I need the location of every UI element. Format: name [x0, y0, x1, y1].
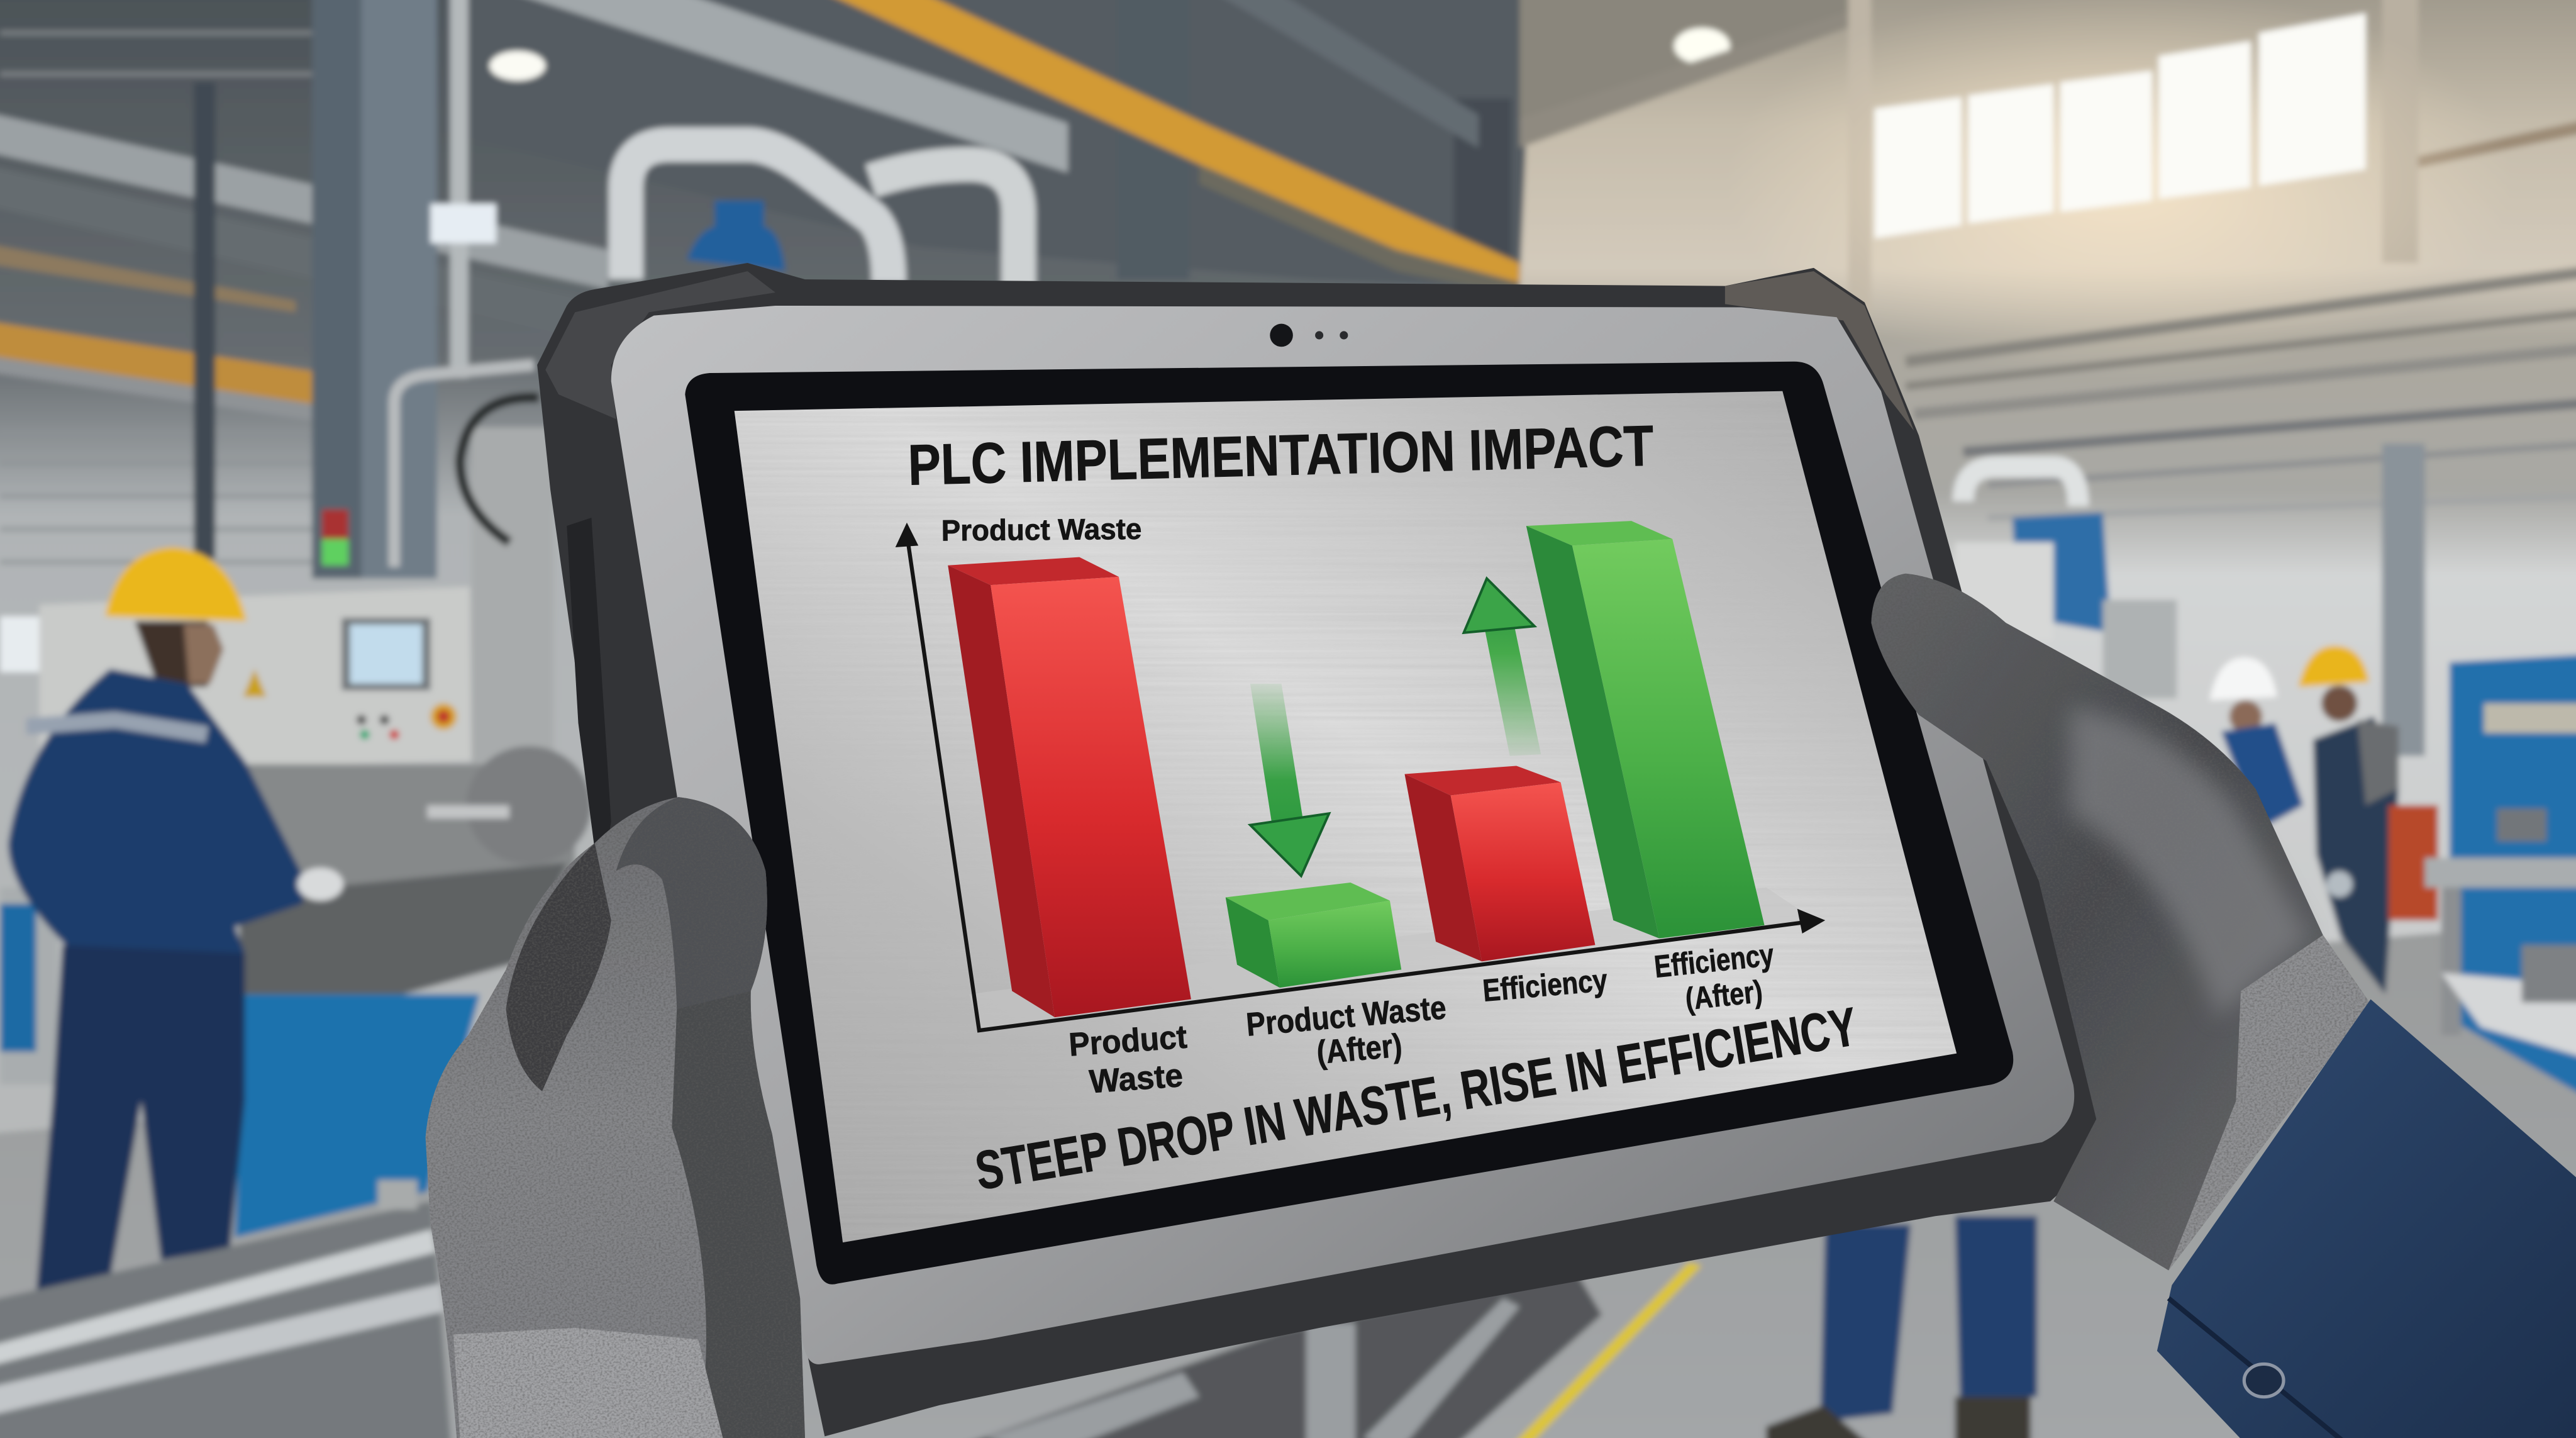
left wall and ceiling [0, 0, 1528, 1315]
right sleeve [2157, 999, 2576, 1438]
glove hand [297, 867, 343, 901]
orange beam left [0, 320, 316, 404]
white hard hat worker [2209, 657, 2303, 830]
bar: efficiency after [1526, 521, 1765, 939]
under-tablet frame area [936, 1274, 1602, 1438]
brushed metal display [735, 391, 1957, 1242]
orange main beam [805, 0, 1519, 282]
helmet [105, 547, 247, 621]
steel rails [0, 1201, 452, 1438]
aluminium bezel [611, 306, 2074, 1364]
blue valve [687, 201, 786, 271]
right glove body [1871, 574, 2370, 1271]
case bumper highlight [545, 271, 775, 419]
right ceiling [1519, 0, 1848, 128]
overhead beam left [0, 112, 608, 289]
standing worker legs [1820, 1216, 2037, 1422]
long duct [485, 0, 1068, 172]
left dark finger patch [506, 843, 611, 1091]
chart title: PLC IMPLEMENTATION IMPACT [907, 414, 1655, 498]
wall corrugation left [0, 33, 312, 562]
right side upper wall lines [1519, 8, 1857, 148]
left shelving [0, 888, 57, 1084]
arrow: efficiency rises [1464, 579, 1541, 756]
right gloved hand [1871, 574, 2576, 1438]
category label: product waste: Waste [1088, 1057, 1184, 1100]
vertical conduit [450, 0, 468, 378]
light glow [1725, 0, 2514, 378]
machine column [472, 427, 553, 772]
silver pipes [626, 145, 889, 282]
category label: efficiency after: (After) [1684, 974, 1764, 1017]
rear column [1117, 0, 1189, 279]
frame struts [985, 1298, 1519, 1438]
left glove shaded side [672, 991, 805, 1438]
worker left [8, 547, 343, 1293]
right glove knuckle highlight [2070, 706, 2308, 1019]
sleeve cuff edge [2168, 1298, 2350, 1438]
category label: product waste [1068, 1019, 1188, 1100]
window [1875, 13, 2366, 238]
steel column [312, 0, 437, 579]
category label: product waste after [1245, 989, 1448, 1071]
category label: product waste: Product [1068, 1019, 1188, 1064]
head [135, 621, 223, 687]
ceiling lights [489, 51, 545, 81]
chart floor shading [969, 888, 1816, 1030]
category label: efficiency after: Efficiency [1653, 937, 1775, 984]
panel buttons [357, 703, 457, 740]
arrow: waste drops [1250, 684, 1329, 876]
brushed texture [735, 391, 1957, 1242]
red cabinet [2389, 805, 2438, 920]
yellow hard hat worker [2299, 646, 2399, 995]
right glove cuff [2168, 935, 2370, 1271]
blue cabinet [2450, 654, 2576, 1101]
left gloved hand [426, 797, 805, 1438]
tablet rugged case [537, 263, 2103, 1436]
lathe chuck [467, 746, 591, 864]
left thumb [616, 797, 767, 1019]
blue machine base [235, 995, 480, 1237]
signal tower light [322, 510, 348, 566]
machine body [247, 764, 575, 896]
bar: product waste [948, 557, 1191, 1017]
sleeve button [2244, 1364, 2284, 1397]
category label: efficiency after [1653, 937, 1775, 1017]
category label: product waste after: (After) [1315, 1027, 1404, 1071]
top right bumper [1725, 271, 1914, 430]
bar: efficiency [1404, 766, 1595, 961]
trousers [36, 945, 245, 1293]
bar: product waste after [1226, 883, 1401, 988]
category label: product waste after: Product Waste [1245, 989, 1448, 1044]
screen frame [685, 362, 2013, 1285]
warning label [243, 669, 266, 697]
right wall [1519, 0, 2576, 1167]
beam shadow [1199, 164, 1519, 296]
left glove cuff [453, 1328, 723, 1438]
headline caption: STEEP DROP IN WASTE, RISE IN EFFICIENCY [971, 996, 1861, 1201]
lathe bed [240, 863, 567, 995]
category label: efficiency: Efficiency [1481, 962, 1609, 1008]
background machine right [1963, 467, 2078, 506]
workbench [2425, 858, 2576, 888]
floor [0, 920, 2576, 1438]
yellow floor line [1503, 1262, 1702, 1438]
jacket [8, 669, 306, 953]
ceiling panel [443, 0, 1528, 287]
control panel [40, 587, 472, 772]
side ports [567, 518, 611, 888]
right pipe racks [1906, 271, 2576, 518]
tablet [537, 263, 2103, 1436]
y axis label: Product Waste [941, 512, 1142, 547]
camera [1270, 324, 1348, 347]
left glove body [426, 797, 805, 1438]
right column [2382, 443, 2425, 756]
axes [896, 523, 1825, 1030]
